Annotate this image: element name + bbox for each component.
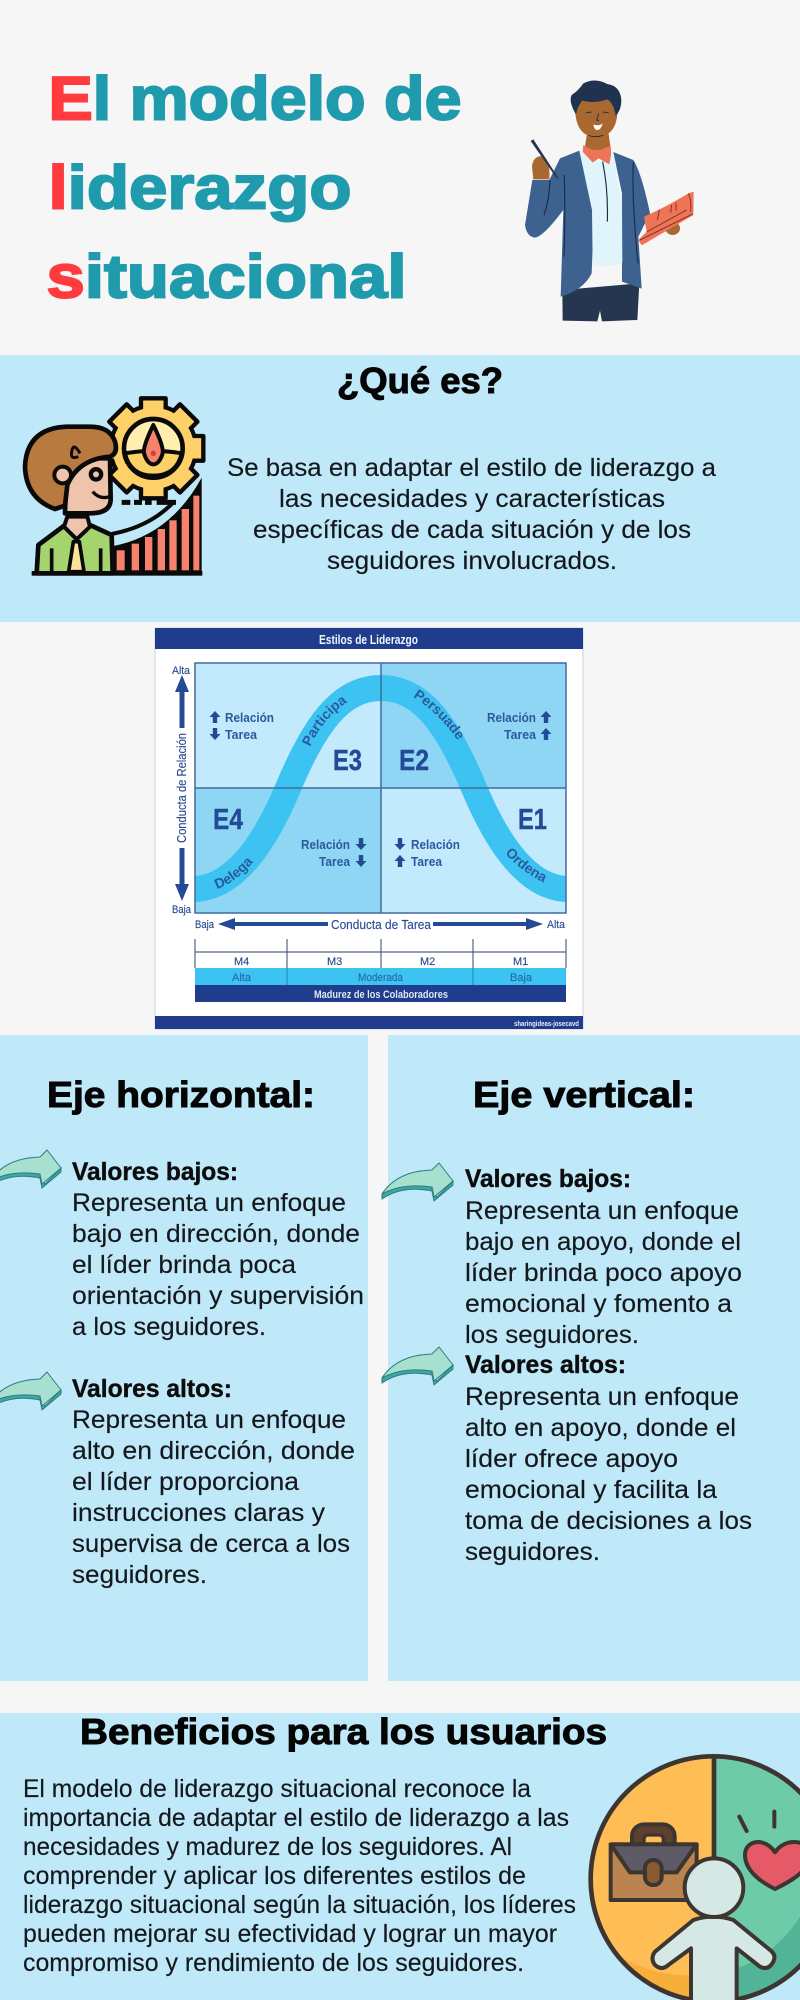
benefits text: necesidades y madurez de los seguidores. Al — [23, 1833, 512, 1861]
text: low values: bajo en dirección, donde — [72, 1220, 360, 1248]
quadrants and curve: Persuade — [414, 690, 462, 740]
quadrants and curve: Ordena — [507, 848, 546, 882]
text: high values: toma de decisiones a los — [465, 1507, 752, 1535]
quadrants and curve: E2 — [399, 745, 429, 777]
quadrants and curve: Delega — [214, 858, 254, 889]
text: high values: Representa un enfoque — [72, 1406, 346, 1434]
horizontal axis: Alta — [547, 919, 566, 931]
icon: arrow high values — [0, 1372, 61, 1410]
icon: man with pen and book — [525, 80, 694, 321]
text: high values: emocional y facilita la — [465, 1476, 717, 1504]
benefits text: importancia de adaptar el estilo de liderazgo a las — [23, 1804, 569, 1832]
text: high values — [72, 1375, 355, 1589]
benefits text: liderazgo situacional según la situación, los líderes — [23, 1891, 576, 1919]
icon: man with gear and growth chart — [25, 398, 203, 576]
vertical axis: Baja — [172, 904, 192, 916]
chart header: Estilos de Liderazgo — [319, 633, 418, 647]
maturity table: Alta — [232, 972, 252, 984]
text: high values: el líder proporciona — [72, 1468, 299, 1496]
quadrants and curve: Relación — [411, 838, 460, 852]
title: situacional — [46, 242, 406, 310]
text: high values: líder ofrece apoyo — [465, 1445, 678, 1473]
text: low values: Representa un enfoque — [465, 1197, 739, 1225]
maturity table: Baja — [510, 972, 533, 984]
text: high values: Representa un enfoque — [465, 1383, 739, 1411]
icon: work-life balance circle — [590, 1755, 800, 2000]
text: low values: líder brinda poco apoyo — [465, 1259, 742, 1287]
quadrants and curve: Relación — [487, 711, 536, 725]
text: high values: Valores altos: — [465, 1351, 626, 1379]
heading: eje vertical: Eje vertical: — [473, 1074, 695, 1115]
maturity table: Madurez de los Colaboradores — [314, 989, 448, 1001]
text: low values: Valores bajos: — [465, 1165, 631, 1193]
description text: las necesidades y características — [279, 485, 665, 513]
text: high values — [465, 1351, 752, 1566]
maturity table: M1 — [513, 956, 528, 968]
title — [46, 64, 462, 310]
description text: seguidores involucrados. — [327, 547, 617, 575]
chart footer: sharingideas-josecavd — [514, 1019, 579, 1028]
quadrants and curve: E4 — [213, 804, 243, 836]
vertical axis — [172, 665, 192, 916]
icon: arrow low values — [382, 1163, 453, 1201]
horizontal axis: Conducta de Tarea — [331, 917, 432, 932]
quadrants and curve: E3 — [333, 745, 362, 777]
description text: específicas de cada situación y de los — [253, 516, 691, 544]
heading: beneficios: Beneficios para los usuarios — [80, 1711, 607, 1752]
quadrants and curve: Relación — [301, 838, 350, 852]
text: high values: supervisa de cerca a los — [72, 1530, 350, 1558]
heading: eje horizontal: Eje horizontal: — [47, 1074, 315, 1115]
quadrants and curve: Tarea — [319, 855, 351, 869]
text: high values: alto en dirección, donde — [72, 1437, 355, 1465]
icon: arrow low values — [0, 1150, 61, 1188]
quadrants and curve: Tarea — [225, 728, 258, 742]
benefits text — [23, 1775, 576, 1977]
chart header — [155, 628, 583, 649]
text: low values: bajo en apoyo, donde el — [465, 1228, 741, 1256]
quadrants and curve: Participa — [302, 698, 348, 746]
horizontal axis: Baja — [195, 919, 215, 931]
benefits text: El modelo de liderazgo situacional reconoce la — [23, 1775, 531, 1803]
title: El modelo de — [48, 64, 462, 132]
benefits text: comprender y aplicar los diferentes estilos de — [23, 1862, 526, 1890]
benefits text: compromiso y rendimiento de los seguidores. — [23, 1949, 524, 1977]
text: low values — [72, 1158, 364, 1341]
text: high values: seguidores. — [465, 1538, 600, 1566]
chart: estilos de liderazgo — [154, 628, 584, 1030]
panel: beneficios — [0, 1711, 800, 2000]
text: high values: seguidores. — [72, 1561, 207, 1589]
benefits text: pueden mejorar su efectividad y lograr un mayor — [23, 1920, 557, 1948]
maturity table: M4 — [234, 956, 249, 968]
maturity table: Moderada — [358, 972, 404, 984]
text: low values: a los seguidores. — [72, 1313, 266, 1341]
quadrants and curve: Relación — [225, 711, 274, 725]
description text: Se basa en adaptar el estilo de liderazgo a — [227, 454, 716, 482]
text: low values: Valores bajos: — [72, 1158, 238, 1186]
title: liderazgo — [48, 154, 352, 222]
quadrants and curve: Tarea — [411, 855, 443, 869]
description text — [227, 454, 716, 575]
text: high values: Valores altos: — [72, 1375, 232, 1403]
text: high values: instrucciones claras y — [72, 1499, 326, 1527]
quadrants and curve: Tarea — [504, 728, 537, 742]
text: low values — [465, 1165, 742, 1349]
horizontal axis — [195, 917, 566, 932]
quadrants and curve — [194, 662, 567, 914]
text: low values: los seguidores. — [465, 1321, 639, 1349]
text: low values: emocional y fomento a — [465, 1290, 732, 1318]
text: low values: Representa un enfoque — [72, 1189, 346, 1217]
quadrants and curve: E1 — [518, 804, 547, 836]
text: low values: el líder brinda poca — [72, 1251, 296, 1279]
text: high values: alto en apoyo, donde el — [465, 1414, 736, 1442]
maturity table: M3 — [327, 956, 342, 968]
header: title and presenter — [46, 64, 694, 321]
maturity table — [195, 939, 566, 1002]
maturity table: M2 — [420, 956, 435, 968]
text: low values: orientación y supervisión — [72, 1282, 364, 1310]
panel: eje horizontal — [0, 1035, 368, 1681]
vertical axis: Alta — [172, 665, 191, 677]
panel: eje vertical — [382, 1035, 800, 1681]
heading: qué es: ¿Qué es? — [337, 360, 503, 401]
chart footer — [155, 1016, 583, 1029]
panel: qué es — [0, 355, 800, 622]
vertical axis: Conducta de Relación — [175, 733, 189, 843]
icon: arrow high values — [382, 1347, 453, 1385]
